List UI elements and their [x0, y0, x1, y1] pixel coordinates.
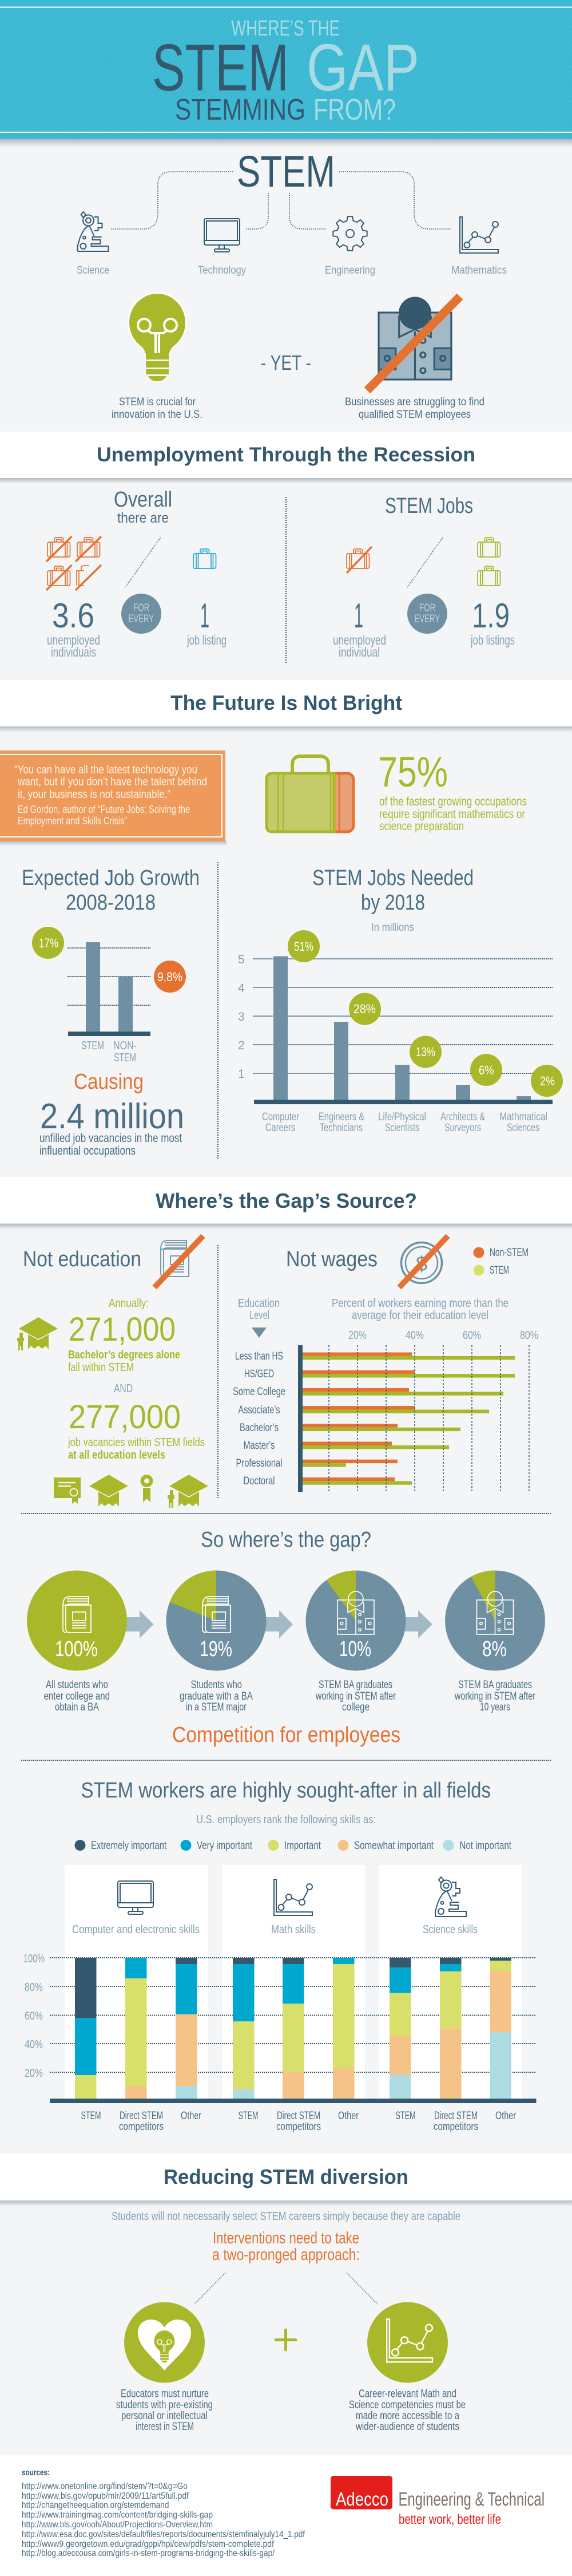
bar chart: jobs needed: Sciences	[507, 1122, 539, 1134]
pie: 19%	[166, 1571, 267, 1670]
text: yet: - YET -	[261, 351, 311, 374]
heading: not wages: Not wages	[286, 1247, 378, 1271]
heading: STEM jobs needed	[312, 866, 474, 915]
divider	[217, 1245, 219, 1498]
heading: competition: Competition for employees	[172, 1723, 400, 1747]
label: education level: Level	[249, 1309, 269, 1322]
stat: 271,000: 271,000	[69, 1311, 176, 1348]
text: and: AND	[114, 1382, 133, 1395]
legend: importance: Not important	[460, 1840, 512, 1852]
sources	[22, 2468, 305, 2558]
label: unemployed individuals: individuals	[51, 645, 96, 659]
stat: 277,000: 277,000	[69, 1398, 181, 1436]
heading: interventions: a two-pronged approach:	[212, 2246, 360, 2264]
text: fastest growing occupations: science preparation	[379, 820, 464, 833]
bar chart: wages: Some College	[233, 1386, 285, 1398]
bar chart: jobs needed: 4	[238, 982, 245, 995]
bar chart: job growth: 17%	[39, 936, 58, 950]
title line 2: GAP	[307, 30, 419, 105]
icons: job listing briefcases	[478, 538, 500, 586]
computer competitors bar	[125, 1958, 146, 2099]
science competitors bar	[440, 1958, 461, 2099]
divider	[217, 862, 219, 1159]
title line 3: FROM?	[313, 93, 396, 127]
text: percent of workers: average for their education level	[352, 1309, 488, 1322]
panel: STEM jobs: 1	[354, 596, 363, 635]
stacked bar chart: 40%	[25, 2038, 43, 2051]
heading band: future	[0, 680, 572, 732]
text: STEM is crucial	[112, 396, 202, 421]
bar chart: job growth: STEM	[81, 1040, 104, 1052]
label: education level	[238, 1297, 280, 1322]
label: unemployed individuals	[47, 633, 100, 659]
dotted slash	[407, 538, 443, 587]
bar chart: wages: HS/GED	[244, 1368, 274, 1380]
bar chart: jobs needed: Scientists	[385, 1122, 419, 1134]
bar chart: wages: 20%	[348, 1329, 367, 1342]
axis labels: Other	[338, 2110, 359, 2122]
bar chart: wages: Professional	[236, 1457, 283, 1469]
axis labels: Other	[181, 2110, 201, 2122]
icon: plus	[276, 2330, 296, 2350]
caption: STEM major	[180, 1679, 253, 1713]
text: employers rank: U.S. employers rank the following skills as:	[196, 1814, 376, 1826]
icon: coin crossed out: $	[416, 1252, 427, 1275]
legend: importance: Very important	[197, 1840, 253, 1852]
axis labels: Direct STEM	[277, 2110, 320, 2122]
bar chart: job growth: NON-	[113, 1040, 137, 1052]
heading band: reducing diversion: Reducing STEM diversion	[164, 2165, 408, 2188]
bar chart: wages: Less than HS	[235, 1350, 283, 1362]
bar chart: jobs needed: 28%	[353, 1002, 376, 1016]
panel: science skills: Science skills	[423, 1923, 478, 1936]
legend: wages	[474, 1247, 529, 1277]
text: bachelor's degrees: fall within STEM	[68, 1361, 134, 1374]
science other bar	[490, 1958, 511, 2099]
heading: so where's the gap: So where’s the gap?	[201, 1528, 371, 1552]
bar chart: jobs needed: 51%	[294, 939, 313, 954]
bar chart: wages: Doctoral	[244, 1475, 275, 1487]
heading: expected job growth: Expected Job Growth	[22, 866, 200, 890]
bar chart: job growth: STEM	[114, 1052, 136, 1064]
sources: http://www.onetonline.org/find/stem/?t=0&g=Go	[22, 2482, 188, 2491]
stacked bar chart: 100%	[23, 1953, 45, 1965]
text: in millions: In millions	[371, 922, 414, 934]
panel: math skills	[222, 1865, 365, 2099]
heading: expected job growth	[22, 866, 200, 915]
pie: 10%: 10%	[339, 1637, 371, 1661]
badge: for every: FOR	[133, 602, 150, 614]
sources: http://www.trainingmag.com/content/bridging-skills-gap	[22, 2510, 213, 2520]
bar chart: jobs needed: Life/Physical	[378, 1111, 426, 1123]
bar chart: jobs needed: 13%	[416, 1045, 435, 1059]
text: job vacancies: job vacancies within STEM fields	[67, 1436, 205, 1449]
heading band: unemployment: Unemployment Through the Recession	[97, 444, 475, 466]
logo: Adecco: better work, better life	[399, 2512, 501, 2527]
text: businesses struggling: qualified STEM employees	[359, 409, 471, 421]
panel: overall: 1	[200, 596, 209, 635]
logo: Adecco	[331, 2476, 545, 2527]
caption: after 10 years: 10 years	[480, 1701, 510, 1713]
icon: book crossed out	[154, 1236, 203, 1287]
dotted slash	[125, 538, 160, 587]
callout: quote: it, your business is not sustainable.”	[18, 788, 170, 801]
heading band: unemployment	[0, 432, 572, 484]
sources: http://changetheequation.org/stemdemand	[22, 2500, 169, 2510]
stacked bar chart: 20%	[25, 2067, 43, 2080]
bar chart: jobs needed: Careers	[265, 1122, 295, 1134]
panel: STEM jobs needed	[238, 866, 563, 1134]
heading band: gap source	[0, 1177, 572, 1230]
caption: after college: working in STEM after	[315, 1690, 396, 1702]
label: engineering: Engineering	[325, 264, 375, 276]
panel: expected job growth	[22, 866, 200, 1157]
bar chart: jobs needed: Computer	[262, 1111, 300, 1123]
panel: science skills	[379, 1865, 522, 2099]
axis labels: Direct STEM	[434, 2110, 478, 2122]
dotted connectors	[110, 172, 451, 229]
text: educators: personal or intellectual	[121, 2410, 208, 2422]
icon: big briefcase	[267, 756, 353, 832]
bar chart: jobs needed: Architects &	[440, 1111, 485, 1123]
bar chart: wages: 80%	[520, 1329, 538, 1342]
text: career-relevant: made more accessible to a	[356, 2410, 459, 2422]
stat: 2.4 million: 2.4 million	[40, 1097, 184, 1136]
panel: overall	[46, 488, 227, 659]
bar chart: jobs needed: Technicians	[320, 1122, 363, 1134]
divider	[21, 1760, 551, 1761]
number: 3.6: 3.6	[52, 596, 94, 635]
caption: STEM major: Students who	[191, 1679, 242, 1691]
caption: after 10 years: STEM BA graduates	[458, 1679, 532, 1691]
text: percent of workers: Percent of workers earning more than the	[332, 1297, 509, 1310]
text: businesses struggling: Businesses are struggling to find	[345, 396, 484, 408]
STEM heading: STEM	[237, 147, 335, 196]
axis labels: STEM	[238, 2110, 259, 2122]
text: educators: students with pre-existing	[116, 2399, 213, 2411]
bar chart: jobs needed: 2	[238, 1039, 245, 1052]
axis labels: Direct STEM	[120, 2110, 163, 2122]
text: students will not: Students will not necessarily select STEM careers simply because they are capable	[112, 2210, 460, 2223]
text: businesses struggling	[345, 396, 484, 421]
icon: heart bulb	[124, 2302, 205, 2383]
panel: computer skills	[65, 1865, 208, 2099]
text: fastest growing occupations	[379, 795, 527, 833]
badge: for every: EVERY	[414, 613, 440, 625]
logo: Adecco: Adecco	[336, 2488, 388, 2510]
icon: employee crossed out	[367, 297, 460, 390]
icon: chart	[460, 217, 498, 253]
axis labels: competitors	[434, 2121, 478, 2133]
icon: light bulb	[128, 292, 187, 381]
panel: not wages	[233, 1236, 538, 1492]
text: educators	[116, 2388, 213, 2433]
label: unemployed individual: unemployed	[333, 633, 386, 647]
stacked bar chart: 60%	[25, 2010, 43, 2022]
number: 1.9: 1.9	[472, 596, 510, 635]
legend: importance: Extremely important	[91, 1840, 167, 1852]
icon: monitor	[204, 219, 240, 252]
heading band: gap source: Where’s the Gap’s Source?	[156, 1189, 417, 1212]
text: STEM is crucial: innovation in the U.S.	[112, 409, 202, 421]
bar chart: jobs needed: Mathmatical	[499, 1111, 547, 1123]
heading: interventions	[212, 2229, 360, 2264]
heading: STEM jobs needed: by 2018	[361, 891, 425, 915]
icon: job listing briefcase	[193, 549, 216, 568]
math other bar	[333, 1958, 355, 2099]
caption: all students: All students who	[46, 1679, 108, 1691]
bar chart: job growth	[32, 927, 186, 1064]
science STEM bar	[390, 1958, 411, 2099]
dotted branches	[194, 2273, 378, 2304]
caption: STEM major: in a STEM major	[186, 1701, 247, 1713]
icon: microscope	[78, 212, 109, 251]
math STEM bar	[233, 1958, 254, 2099]
heading: sought-after: STEM workers are highly sought-after in all fields	[81, 1779, 491, 1803]
text: educators: Educators must nurture	[121, 2388, 209, 2400]
bar chart: jobs needed: 6%	[479, 1063, 494, 1077]
legend: wages: STEM	[490, 1265, 509, 1277]
bar chart: wages: 40%	[406, 1329, 424, 1342]
callout: quote: Ed Gordon, author of “Future Jobs: Solving the	[18, 804, 190, 815]
title line 3: STEMMING	[175, 93, 305, 127]
bar chart: wages	[233, 1329, 538, 1492]
callout: quote: want, but if you don’t have the talent behind	[17, 776, 207, 788]
sources: sources:	[22, 2468, 50, 2478]
bar chart: jobs needed	[238, 930, 563, 1134]
text: unfilled vacancies: influential occupations	[39, 1144, 136, 1157]
axis labels: competitors	[119, 2121, 164, 2133]
title line 1: WHERE’S THE	[231, 17, 340, 41]
legend: wages: Non-STEM	[490, 1247, 529, 1259]
text: STEM is crucial: STEM is crucial for	[119, 396, 196, 408]
icons: credentials	[54, 1475, 208, 1508]
axis labels: competitors	[276, 2121, 321, 2133]
text: educators: interest in STEM	[136, 2421, 194, 2433]
label: unemployed individuals: unemployed	[47, 633, 100, 647]
pie: 8%: 8%	[482, 1637, 507, 1661]
label: unemployed individual	[333, 633, 386, 659]
text: there are: there are	[117, 510, 169, 526]
computer other bar	[176, 1958, 197, 2099]
caption: after 10 years	[454, 1679, 535, 1713]
legend: importance	[74, 1840, 512, 1852]
label: job listings: job listings	[470, 633, 515, 647]
callout: quote: “You can have all the latest technology you	[14, 764, 197, 776]
icon: graduation cap	[17, 1317, 58, 1350]
axis labels: STEM	[81, 2110, 101, 2122]
axis labels: Other	[495, 2110, 516, 2122]
icons: unemployed briefcases	[46, 536, 101, 590]
panel: computer skills: Computer and electronic skills	[72, 1923, 200, 1936]
panel: math skills: Math skills	[271, 1923, 316, 1936]
icon: unemployed briefcase	[347, 547, 372, 573]
heading band: future: The Future Is Not Bright	[170, 691, 402, 714]
badge: for every	[407, 594, 447, 634]
panel: not education	[17, 1236, 208, 1508]
legend: importance: Important	[284, 1840, 321, 1852]
label: unemployed individual: individual	[339, 645, 380, 659]
caption: all students	[43, 1679, 110, 1713]
title line 2: STEM	[152, 30, 289, 105]
legend: importance: Somewhat important	[354, 1840, 434, 1852]
bar chart: jobs needed: Surveyors	[444, 1122, 481, 1134]
pie: 8%	[445, 1570, 545, 1670]
text: career-relevant: wider-audience of students	[355, 2421, 459, 2433]
text: career-relevant	[349, 2388, 466, 2433]
text: career-relevant: Career-relevant Math and	[359, 2388, 456, 2400]
text: annually: Annually:	[109, 1297, 149, 1310]
text: unfilled vacancies: unfilled job vacancies in the most	[39, 1132, 182, 1145]
badge: for every: FOR	[419, 602, 436, 614]
bar chart: wages: Master’s	[244, 1440, 275, 1452]
bar chart: wages: Bachelor’s	[240, 1422, 279, 1434]
caption: after college	[315, 1679, 396, 1713]
panel: STEM jobs	[333, 494, 515, 659]
icon: chart circle	[367, 2302, 448, 2383]
icon: coin crossed out	[399, 1236, 448, 1287]
label: education level: Education	[238, 1297, 280, 1310]
text: unfilled vacancies	[39, 1132, 182, 1157]
callout: quote: Employment and Skills Crisis”	[18, 815, 127, 827]
text: job vacancies: at all education levels	[68, 1449, 165, 1461]
label: science: Science	[77, 264, 109, 276]
pie: 10%	[305, 1571, 406, 1670]
sources: http://www.esa.doc.gov/sites/default/files/reports/documents/stemfinalyjuly14_1.pdf	[22, 2530, 305, 2539]
sources: http://www.bls.gov/ooh/About/Projections-Overview.htm	[22, 2520, 213, 2530]
title line 2	[152, 30, 419, 105]
text: percent of workers	[332, 1297, 509, 1322]
pie: 100%	[27, 1571, 127, 1670]
stat: 75%: 75%	[378, 748, 448, 796]
heading: not education: Not education	[23, 1247, 141, 1271]
bar chart: jobs needed: 1	[238, 1068, 245, 1081]
label: technology: Technology	[198, 264, 246, 276]
bar chart: jobs needed: 5	[238, 953, 245, 966]
heading: overall: Overall	[114, 488, 172, 512]
stacked bar chart	[23, 1953, 537, 2133]
computer STEM bar	[75, 1958, 96, 2099]
caption: after 10 years: working in STEM after	[454, 1690, 535, 1702]
heading: interventions: Interventions need to take	[213, 2229, 359, 2247]
caption: STEM major: graduate with a BA	[180, 1690, 253, 1702]
stacked bar chart: 80%	[25, 1981, 43, 1994]
bar chart: wages: Associate’s	[238, 1404, 280, 1416]
text: causing: Causing	[74, 1070, 144, 1094]
text: career-relevant: Science competencies must be	[349, 2399, 466, 2411]
bar chart: wages: 60%	[463, 1329, 481, 1342]
footer background	[0, 2455, 572, 2576]
callout: quote	[0, 750, 227, 846]
caption: all students: obtain a BA	[55, 1701, 99, 1713]
title banner	[0, 0, 572, 147]
math competitors bar	[283, 1958, 304, 2099]
caption: all students: enter college and	[43, 1690, 110, 1702]
bar chart: jobs needed: 2%	[540, 1074, 555, 1088]
text: fastest growing occupations: require significant mathematics or	[379, 808, 525, 821]
divider	[21, 1513, 551, 1514]
axis labels: STEM	[396, 2110, 415, 2122]
heading: STEM jobs needed: STEM Jobs Needed	[312, 866, 474, 890]
sources: http://www.bls.gov/opub/mlr/2009/11/art5full.pdf	[22, 2491, 189, 2501]
text: job vacancies	[67, 1436, 205, 1461]
pie: 19%: 19%	[200, 1637, 232, 1661]
label: job listing: job listing	[186, 633, 227, 647]
heading: STEM jobs: STEM Jobs	[385, 494, 473, 518]
arrows between pies	[125, 1610, 432, 1638]
text: fastest growing occupations: of the fastest growing occupations	[379, 795, 527, 808]
bar chart: jobs needed: 3	[238, 1010, 245, 1024]
text: bachelor's degrees	[68, 1349, 180, 1374]
caption: after college: STEM BA graduates	[319, 1679, 392, 1691]
caption: after college: college	[342, 1701, 370, 1713]
axis labels	[81, 2110, 516, 2133]
text: bachelor's degrees: Bachelor’s degrees alone	[68, 1349, 180, 1361]
heading: expected job growth: 2008-2018	[66, 891, 156, 915]
pie: 100%: 100%	[55, 1637, 98, 1661]
badge: for every	[121, 594, 161, 634]
heading band: reducing diversion	[0, 2154, 572, 2206]
sources: http://blog.adeccousa.com/girls-in-stem-programs-bridging-the-skills-gap/	[22, 2549, 275, 2558]
badge: for every: EVERY	[128, 613, 154, 625]
arrow: down triangle	[252, 1327, 267, 1338]
bar chart: job growth: 9.8%	[157, 970, 182, 984]
icon: gear	[333, 216, 367, 251]
label: mathematics: Mathematics	[451, 264, 507, 276]
bar chart: jobs needed: Engineers &	[319, 1111, 364, 1123]
divider	[285, 497, 287, 663]
sources: http://www9.georgetown.edu/grad/gppi/hpi/cew/pdfs/stem-complete.pdf	[22, 2539, 274, 2549]
